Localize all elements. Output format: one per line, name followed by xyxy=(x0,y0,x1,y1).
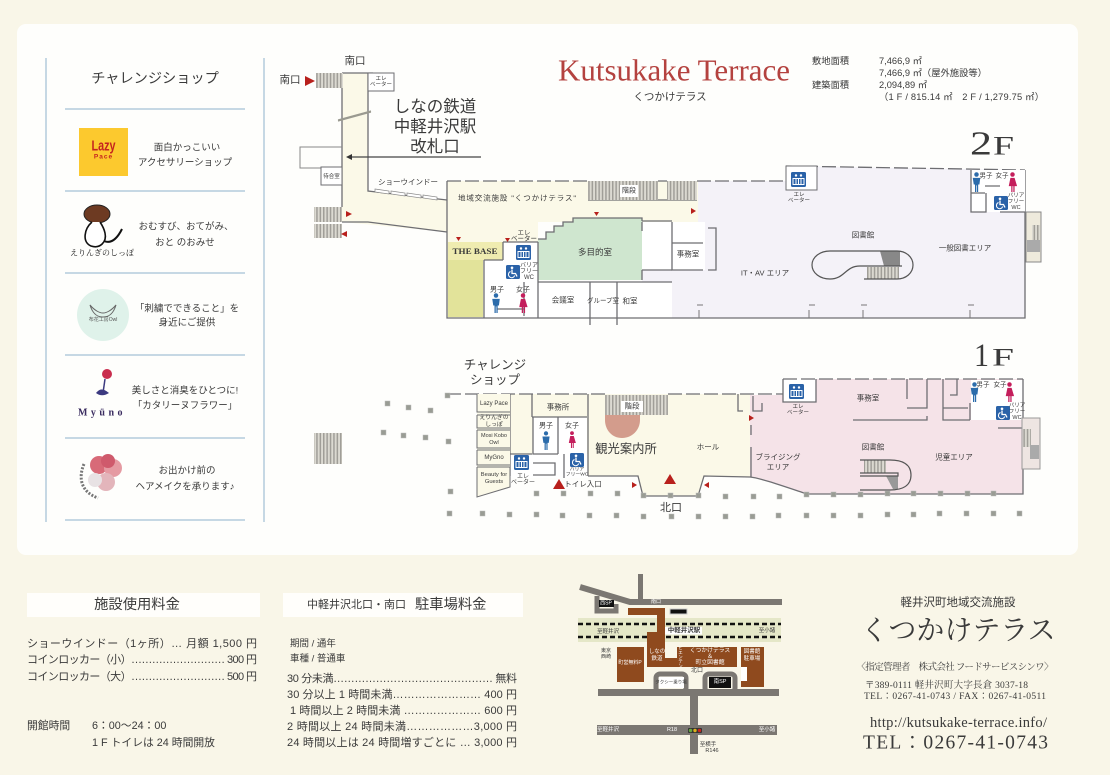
address xyxy=(864,679,1046,702)
2F toilets east: 女子 xyxy=(996,170,1009,180)
waiting room: 待合室 xyxy=(323,172,340,180)
room labels 1F xyxy=(756,392,973,472)
map labels: 図書館 xyxy=(744,647,761,655)
2F elevator east xyxy=(786,166,817,204)
map labels: 町立図書館 xyxy=(696,658,725,666)
2F accessible toilet west: WC xyxy=(524,275,535,281)
2F accessible toilet west: フリー xyxy=(520,268,538,275)
shops column: MyGno xyxy=(484,455,504,461)
roads xyxy=(580,574,782,754)
heading: challenge shop: チャレンジショップ xyxy=(91,71,219,87)
shop: Eringi no Shippo: おと のおみせ xyxy=(155,238,215,248)
heading: parking fees xyxy=(307,596,486,613)
2F toilets east: 男子 xyxy=(980,172,993,180)
waiting room xyxy=(321,167,342,185)
site area stats: 敷地面積 xyxy=(812,55,849,66)
callout: Shinano railway gate: しなの鉄道 xyxy=(394,97,476,116)
title: Kutsukake Terrace: Kutsukake Terrace xyxy=(558,52,790,88)
shop: Shishu Kobo Owl: 布花工房Owl xyxy=(89,316,117,323)
2F floor label: F xyxy=(993,132,1014,160)
room labels 2F: 会議室 xyxy=(552,294,575,304)
room labels 1F: 児童エリア xyxy=(935,452,973,462)
room labels 1F: 図書館 xyxy=(862,442,885,452)
opening hours xyxy=(27,719,215,749)
parking conditions xyxy=(290,638,346,664)
1F elevator east: ベーター xyxy=(787,408,809,416)
2F toilets east: フリー xyxy=(1008,198,1024,205)
room: THE BASE: THE BASE xyxy=(452,246,498,256)
map labels: 駐車場 xyxy=(744,654,761,662)
room labels 1F: エリア xyxy=(767,462,789,472)
1F accessible toilet: フリーWC xyxy=(566,472,589,478)
callout: Shinano railway gate: 中軽井沢駅 xyxy=(394,117,476,136)
site area stats: 7,466,9 ㎡（屋外施設等） xyxy=(879,67,987,78)
parking conditions: 車種 / 普通車 xyxy=(290,652,346,664)
1F library stairs xyxy=(860,460,911,490)
1F stairs and circular hall: 階段 xyxy=(624,400,640,410)
map labels: 南口 xyxy=(651,598,661,605)
2F men's toilet west xyxy=(490,286,504,313)
shops column: Mosi Kobo xyxy=(481,433,507,439)
map labels: 鉄道 xyxy=(651,654,663,662)
room labels 2F xyxy=(552,230,991,306)
heading: parking fees: 中軽井沢北口・南口 xyxy=(307,597,406,611)
1F east toilets: バリア xyxy=(1009,402,1026,409)
stairs isolated west xyxy=(314,433,342,464)
panel: parking fees xyxy=(283,593,523,749)
rail band xyxy=(578,618,781,642)
site area stats: 建築面積 xyxy=(812,79,849,90)
room labels 2F: 事務室 xyxy=(677,248,700,258)
map labels: 至横手 xyxy=(700,740,717,748)
floor plan: 1F xyxy=(314,358,1040,519)
1F elevator west: ベーター xyxy=(511,478,535,486)
fee list: コインロッカー（大）……………………… 500 円 xyxy=(27,669,257,683)
room: THE BASE xyxy=(448,242,503,317)
map labels: ビエンテン xyxy=(678,645,684,669)
shop: Lazy Pace: アクセサリーショップ xyxy=(138,158,233,168)
walls 2F xyxy=(447,180,786,182)
site area stats: 7,466,9 ㎡ xyxy=(879,56,923,66)
1F east toilets: フリー xyxy=(1009,408,1025,415)
stairs 2F top: 階段 xyxy=(622,186,636,194)
shop: Eringi no Shippo: おむすび、おてがみ、 xyxy=(138,220,234,232)
floor 1F fills xyxy=(510,394,750,496)
map labels: 西SP xyxy=(600,600,612,606)
1F floor label: 1 xyxy=(974,338,989,374)
toilet entrance marker: トイレ入口 xyxy=(564,480,602,488)
designated manager: 〈指定管理者 株式会社 フードサービスシンワ〉 xyxy=(856,661,1054,673)
website: http://kutsukake-terrace.info/ xyxy=(870,715,1048,731)
floor 2F fills xyxy=(447,181,698,318)
parking rates: 2 時間以上 24 時間未満………………3,000 円 xyxy=(287,720,517,733)
2F elevator east: エレ xyxy=(793,191,805,198)
room labels 2F: 和室 xyxy=(622,296,638,306)
2F floor label xyxy=(970,126,1014,162)
shop: Beauty for Guests: ヘアメイクを承ります♪ xyxy=(135,482,235,492)
walls 1F xyxy=(447,379,1023,394)
shop: Shishu Kobo Owl xyxy=(77,289,239,341)
shops column: Beauty for xyxy=(481,472,507,478)
shop: Beauty for Guests xyxy=(81,454,235,498)
1F floor label: F xyxy=(992,344,1014,372)
label: south exit left with arrow: 南口 xyxy=(280,73,300,86)
telephone: TEL：0267-41-0743 xyxy=(863,732,1048,754)
label: show window: ショーウインドー xyxy=(378,178,438,186)
fee list: コインロッカー（小）……………………… 300 円 xyxy=(27,653,257,666)
elevator box: エレ xyxy=(375,75,387,82)
room labels 2F: グループ室 xyxy=(587,296,620,304)
shop: Myuno: 「カタリーヌフラワー」 xyxy=(133,400,237,412)
map labels: タクシー乗り場 xyxy=(655,678,687,686)
1F east toilets: 女子 xyxy=(994,380,1007,388)
shop: Shishu Kobo Owl: 身近にご提供 xyxy=(159,316,216,328)
map labels: しなの xyxy=(649,648,665,655)
heading: parking fees: 駐車場料金 xyxy=(415,596,486,613)
subtitle: くつかけテラス xyxy=(633,91,707,103)
rail band: 至軽井沢 xyxy=(597,627,619,635)
heading: facility fees: 施設使用料金 xyxy=(94,596,180,613)
1F elevator east xyxy=(787,384,809,416)
opening hours: 6：00〜24：00 xyxy=(92,720,166,732)
map labels: 中軽井沢駅 xyxy=(668,625,701,634)
toilet entrance marker xyxy=(553,479,602,489)
panel: contact info xyxy=(856,595,1056,754)
1F men's toilet: 男子 xyxy=(539,422,553,430)
white upper panel xyxy=(17,24,1078,555)
1F east toilets: WC xyxy=(1012,415,1022,421)
room labels 1F: ブライジング xyxy=(756,452,801,462)
site area stats xyxy=(812,55,1044,102)
shops column xyxy=(477,394,510,497)
floor plan: south concourse xyxy=(280,54,447,238)
1F accessible toilet: バリア xyxy=(570,466,584,472)
2F east stairs xyxy=(1026,212,1041,262)
fee list: ショーウインドー（1ヶ所）… 月額 1,500 円 xyxy=(27,636,257,650)
parking conditions: 期間 / 通年 xyxy=(290,638,336,650)
map labels: 西崎 xyxy=(601,653,611,660)
2F elevator west xyxy=(511,230,537,260)
map labels: 北口 xyxy=(691,666,703,674)
room labels 2F: 図書館 xyxy=(852,230,875,240)
address: TEL：0267-41-0743 / FAX：0267-41-0511 xyxy=(864,692,1046,702)
stairs lower xyxy=(314,207,342,238)
map labels: R18 xyxy=(667,727,677,733)
shops column: Owl xyxy=(489,440,499,446)
shop: Lazy Pace: 面白かっこいい xyxy=(154,142,220,154)
shop: Lazy Pace: Lazy xyxy=(92,138,116,154)
map labels: 町営無料P xyxy=(618,659,642,666)
room: multipurpose: 多目的室 xyxy=(578,247,612,257)
callout: Shinano railway gate xyxy=(346,97,481,160)
label: south exit left with arrow xyxy=(280,73,315,86)
room labels 1F: 事務室 xyxy=(857,392,880,402)
shop: Eringi no Shippo: えりんぎのしっぽ xyxy=(70,248,134,258)
shop: Lazy Pace xyxy=(79,128,233,176)
opening hours: 1 F トイレは 24 時間開放 xyxy=(92,735,215,749)
north entrance markers xyxy=(632,415,754,488)
shops column: しっぽ xyxy=(485,420,503,428)
shop: Beauty for Guests: お出かけ前の xyxy=(158,464,216,476)
2F toilets east: WC xyxy=(1011,205,1021,211)
address: 〒389-0111 軽井沢町大字長倉 3037-18 xyxy=(865,679,1028,691)
1F accessible toilet xyxy=(566,453,589,478)
shop: Myuno xyxy=(78,369,238,418)
1F office: 事務所 xyxy=(547,402,570,412)
panel: facility fees xyxy=(27,593,260,749)
map buildings xyxy=(617,608,764,687)
1F floor label xyxy=(974,338,1014,374)
2F men's toilet west: 男子 xyxy=(490,286,504,294)
site area stats: （1 F / 815.14 ㎡ 2 F / 1,279.75 ㎡） xyxy=(879,92,1044,102)
callout: Shinano railway gate: 改札口 xyxy=(410,137,460,156)
1F east toilets xyxy=(971,380,1026,421)
traffic light xyxy=(688,728,702,733)
1F men's toilet xyxy=(539,422,553,450)
2F accessible toilet west xyxy=(506,262,538,281)
1F women's toilet: 女子 xyxy=(565,420,579,430)
organisation line: 軽井沢町地域交流施設 xyxy=(900,595,1016,609)
2F library stairs xyxy=(812,251,913,279)
label: challenge shop: チャレンジ xyxy=(464,358,526,372)
panel: challenge shops xyxy=(46,58,264,522)
2F accessible toilet west: バリア xyxy=(520,262,538,269)
2F floor label: 2 xyxy=(970,126,992,162)
1F stairs and circular hall xyxy=(605,395,668,438)
2F toilets east xyxy=(971,170,1025,212)
fee list xyxy=(27,636,257,683)
parking rates: 24 時間以上は 24 時間増すごとに … 3,000 円 xyxy=(287,735,517,749)
parking rates: 30 分以上 1 時間未満…………………… 400 円 xyxy=(287,688,517,701)
1F elevator east: エレ xyxy=(792,403,804,410)
elevator box xyxy=(368,73,394,91)
shop: Eringi no Shippo xyxy=(70,205,234,258)
2F elevator west: ベーター xyxy=(511,234,537,242)
2F women's toilet west xyxy=(516,284,530,313)
room labels 2F: IT・AV エリア xyxy=(741,268,789,278)
logotype Kutsukake Terrace kana: くつかけテラス xyxy=(860,616,1056,646)
map labels: 至小諸 xyxy=(759,725,776,733)
label: north exit: 北口 xyxy=(660,501,682,514)
map labels: 至軽井沢 xyxy=(597,725,619,733)
shops column: えりんぎの xyxy=(480,413,509,421)
map labels: くつかけテラス xyxy=(690,647,730,654)
label: community facility: 地域交流施設 "くつかけテラス" xyxy=(458,192,576,202)
2F women's toilet west: 女子 xyxy=(516,284,530,294)
map labels xyxy=(597,598,776,754)
1F east stairs xyxy=(1022,418,1040,469)
1F elevator west: エレ xyxy=(517,473,529,480)
pillars xyxy=(381,393,1022,519)
parking rates: 1 時間以上 2 時間未満 ………………… 600 円 xyxy=(290,704,517,717)
label: south exit top: 南口 xyxy=(344,54,366,67)
label: tourist information: 観光案内所 xyxy=(595,442,657,456)
label: challenge shop: ショップ xyxy=(470,373,520,387)
room: multipurpose xyxy=(538,218,642,280)
shops column: Lazy Pace xyxy=(480,401,509,407)
parking rates xyxy=(287,671,517,749)
map labels: R146 xyxy=(705,748,719,754)
stairs 2F top xyxy=(588,181,697,200)
map labels: 南SP xyxy=(714,677,727,685)
map labels: ＆ xyxy=(707,653,713,660)
panel: access map xyxy=(578,574,782,754)
shop: Shishu Kobo Owl: 「刺繍でできること」を xyxy=(135,302,239,314)
floor plan: 2F xyxy=(447,166,1041,325)
1F elevator west xyxy=(511,455,535,486)
shop: Myuno: Myüno xyxy=(78,408,126,418)
rail band: 至小諸 xyxy=(759,626,776,634)
label: challenge shop xyxy=(464,358,526,387)
2F elevator east: ベーター xyxy=(788,196,810,204)
room labels 2F: 一般図書エリア xyxy=(939,242,991,252)
label: hall: ホール xyxy=(697,442,720,452)
2F elevator west: エレ xyxy=(518,230,530,236)
1F east toilets: 男子 xyxy=(976,380,990,388)
2F toilets east: バリア xyxy=(1008,192,1025,199)
opening hours: 開館時間 xyxy=(27,719,70,732)
elevator box: ベーター xyxy=(370,80,392,88)
map labels: 東京 xyxy=(601,647,611,654)
shop: Lazy Pace: Pace xyxy=(94,154,113,160)
site area stats: 2,094,89 ㎡ xyxy=(879,80,928,90)
parking rates: 30 分未満……………………………………… 無料 xyxy=(287,671,517,685)
shop: Myuno: 美しさと消臭をひとつに! xyxy=(132,384,238,396)
shops column: Guests xyxy=(485,479,503,485)
1F women's toilet xyxy=(565,420,579,448)
